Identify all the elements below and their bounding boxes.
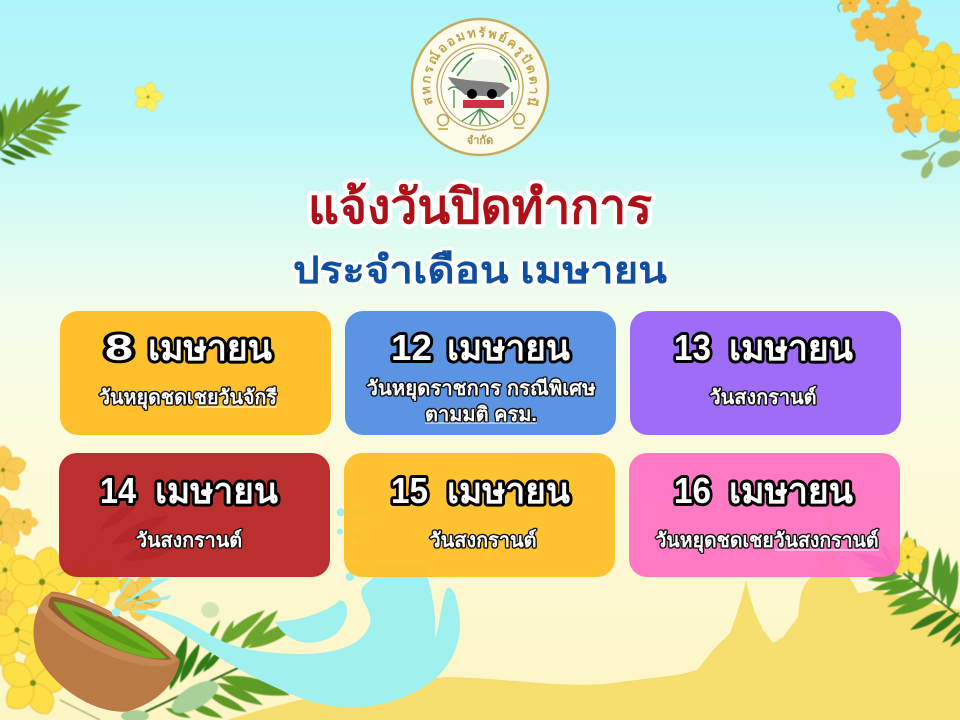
card: 8 April [60, 311, 331, 435]
palm frond: bottom right [850, 530, 960, 649]
description line 1: วันหยุดราชการ กรณีพิเศษ [366, 377, 596, 401]
date heading: 16 [674, 470, 711, 511]
seal name text: สหกรณ์ออมทรัพย์ครูปัตตานี [422, 26, 539, 106]
description line 2: ตามมติ ครม. [425, 404, 537, 426]
date heading: เมษายน [155, 470, 278, 511]
date heading: เมษายน [447, 327, 570, 368]
flower cluster: bottom left [0, 446, 171, 720]
seal mountain [452, 53, 516, 84]
date heading [674, 327, 853, 368]
card: 13 April [630, 311, 901, 435]
clay bowl [33, 592, 180, 712]
date heading [100, 470, 278, 511]
date heading [674, 470, 853, 511]
title: แจ้งวันปิดทำการ [308, 181, 652, 234]
date heading: เมษายน [148, 327, 272, 368]
description: วันหยุดชดเชยวันจักรี [99, 386, 277, 410]
palm frond: bottom centre [121, 602, 306, 720]
description: วันสงกรานต์ [136, 529, 242, 552]
water splash [113, 508, 460, 707]
date heading: 12 [391, 327, 432, 368]
ground and temple silhouette [227, 510, 960, 720]
date heading: 14 [100, 470, 136, 511]
palm frond: top left [0, 83, 83, 167]
card: 12 April [345, 311, 616, 435]
card: 16 April [629, 453, 900, 577]
faint leaves behind the red card [97, 496, 192, 567]
card: 14 April [59, 453, 330, 577]
date heading [391, 470, 570, 511]
seal side emblems [438, 114, 524, 129]
description: วันสงกรานต์ [710, 386, 816, 409]
seal red base [463, 100, 504, 108]
date heading: เมษายน [729, 327, 853, 368]
flower: top left single [129, 78, 167, 116]
seal limited text: จำกัด [467, 134, 493, 147]
date heading: 8 [105, 327, 133, 368]
flower: top right single [826, 71, 860, 104]
flower cluster: top right [838, 0, 960, 180]
card: 15 April [344, 453, 615, 577]
seal cannon [448, 77, 510, 97]
description: วันสงกรานต์ [430, 529, 536, 552]
description: วันหยุดชดเชยวันสงกรานต์ [656, 529, 878, 553]
date heading: เมษายน [729, 470, 853, 511]
date heading: เมษายน [447, 470, 570, 511]
seal palm and rays [448, 87, 512, 125]
subtitle: ประจำเดือน เมษายน [293, 250, 667, 292]
date heading: 13 [674, 327, 711, 368]
logo: cooperative seal [410, 18, 550, 156]
date heading [391, 327, 570, 368]
date heading: 15 [391, 470, 428, 511]
